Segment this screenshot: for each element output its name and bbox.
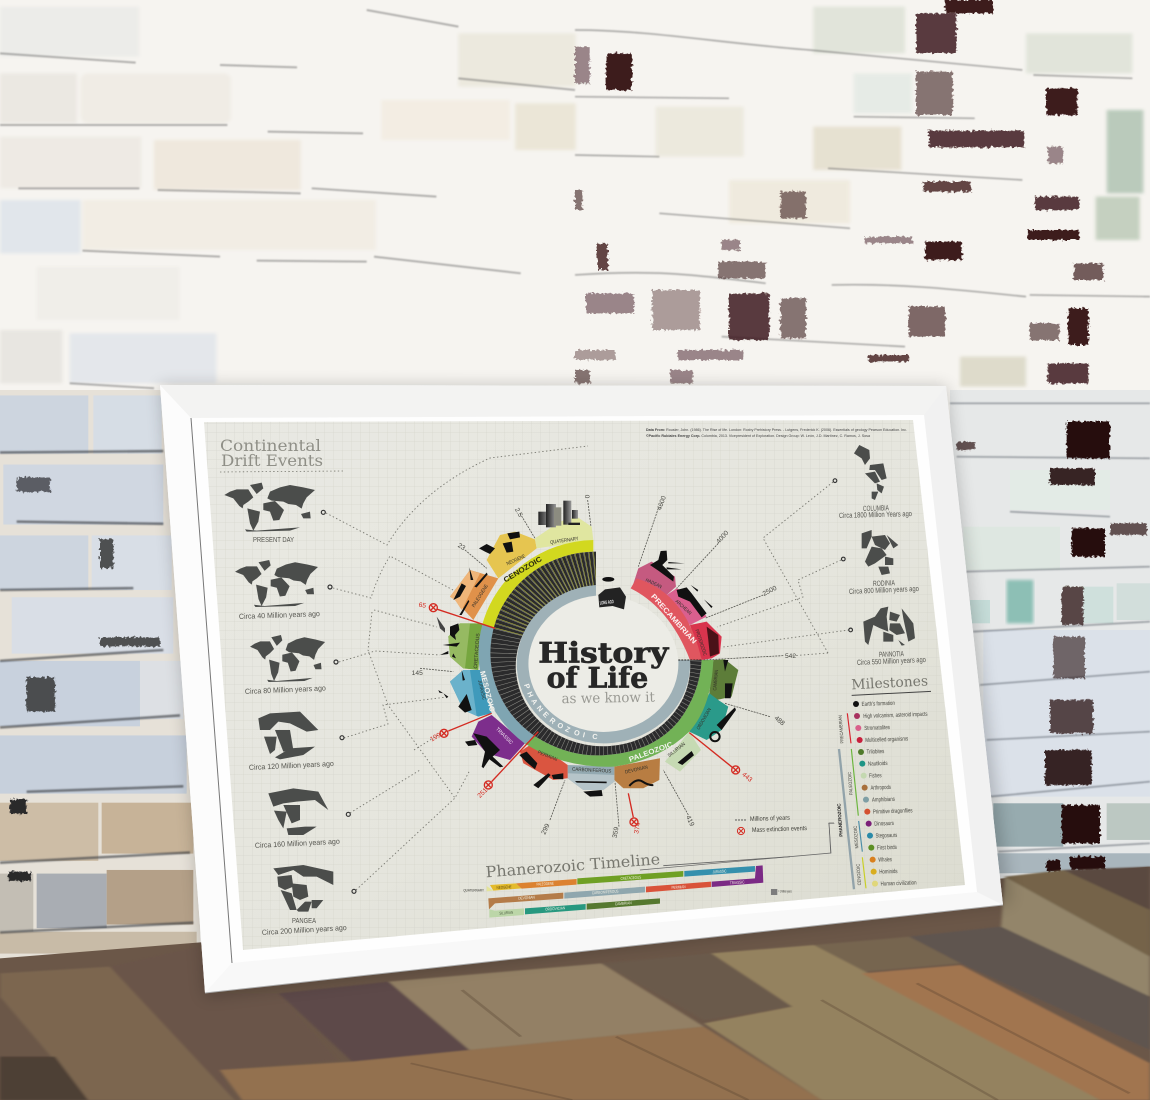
milestone labels: Human civilization <box>881 880 917 888</box>
Hadean eruption <box>650 551 685 582</box>
mass extinction markers <box>429 604 740 826</box>
map: Columbia <box>833 445 887 500</box>
period labels <box>471 536 720 776</box>
ring text: Phanerozoic: A <box>529 697 540 707</box>
milestone labels: Stromatolites <box>864 725 890 732</box>
era labels: MESOZOIC <box>478 670 497 713</box>
time scale numbers: 359 <box>612 826 621 839</box>
Mesozoic band <box>478 623 535 744</box>
Jurassic animal <box>458 670 472 713</box>
supercontinent maps, right column <box>833 445 926 667</box>
mass extinction numbers: 199 <box>429 732 443 743</box>
period segments <box>448 517 738 790</box>
lower-right wall strip <box>950 390 1150 880</box>
time scale numbers: 145 <box>412 670 423 677</box>
period labels: PERMIAN <box>537 750 558 763</box>
timeline labels: SILURIAN <box>499 910 513 916</box>
time scale numbers: 419 <box>684 815 695 828</box>
credits: Data From: Rousler, John. (1986). The Rise of life. London: Roxby Prehistory Press. - Lutgens, Frederick K. (2006). Essentials of geology Pearson Education. Inc. <box>646 427 907 432</box>
panel: Phanerozoic timeline <box>463 850 792 918</box>
map: 40 million years ago <box>235 560 318 607</box>
time scale numbers: 0 <box>584 494 591 498</box>
caption: present day: PRESENT DAY <box>253 535 294 544</box>
milestone labels: First birds <box>877 845 897 852</box>
period labels: PALEOGENE <box>471 583 490 609</box>
caption: Pangea: Circa 200 Million years ago <box>262 923 347 937</box>
Devonian fish <box>629 780 653 786</box>
credits: ©Pacific Rubiales Energy Corp. Colombia, 2013. Vicepresident of Exploration. Design Group: W. León, J.D. Martínez, C. Ramos, J. Sosa <box>646 433 871 438</box>
milestone labels: Arthropods <box>871 785 891 792</box>
lower-left wall strip <box>0 390 200 960</box>
timeline labels: CAMBRIAN <box>615 900 632 906</box>
Triassic dinosaur <box>473 733 503 768</box>
milestones heading: Milestones <box>851 673 928 693</box>
era labels: PALEOZOIC <box>628 739 675 764</box>
ring text: Phanerozoic: C <box>592 732 599 741</box>
title: as we know it <box>561 690 655 707</box>
time scale numbers: 542 <box>785 653 796 660</box>
dot: 80 million <box>334 660 338 664</box>
grey Phanerozoic ring <box>517 585 690 743</box>
ring text: Phanerozoic: P <box>522 683 532 690</box>
ring text: Phanerozoic: N <box>535 704 545 713</box>
city skyline <box>538 501 580 527</box>
dot: 40 million <box>328 585 332 589</box>
map: present day <box>224 483 325 532</box>
time scale numbers: 488 <box>773 715 786 728</box>
white picture frame <box>160 385 1003 993</box>
period: Proterozoic <box>690 622 722 660</box>
period: Cambrian <box>709 659 738 700</box>
period labels: CAMBRIAN <box>712 669 720 691</box>
map: 80 million years ago <box>250 635 325 682</box>
period labels: NEOGENE <box>506 553 527 567</box>
Archean forms <box>677 585 713 617</box>
period labels: ORDOVICIAN <box>696 707 713 731</box>
ring text: Phanerozoic: R <box>548 715 558 726</box>
period: Triassic <box>472 715 525 760</box>
time scale numbers: 4600 <box>656 495 668 511</box>
caption: Pannotia: PANNOTIA <box>879 649 904 659</box>
period: Archean <box>667 588 707 625</box>
period: Paleogene <box>450 570 498 620</box>
Long Ago rock: LONG AGO <box>600 599 614 607</box>
period labels: DEVONIAN <box>624 764 649 776</box>
title: of Life <box>547 661 648 694</box>
caption: Columbia: COLUMBIA <box>863 503 889 513</box>
period: Silurian <box>665 732 701 772</box>
caption: 80 million: Circa 80 Million years ago <box>245 683 326 696</box>
era timeline labels: PALEOZOIC <box>847 771 854 795</box>
ring text: Phanerozoic: I <box>582 730 586 739</box>
upper wall bricks, left half <box>0 7 576 388</box>
caption: Rodinia: RODINIA <box>873 578 895 588</box>
era labels <box>478 554 699 764</box>
milestone labels: Trilobites <box>867 749 884 756</box>
map: Pannotia <box>849 607 915 646</box>
mass extinction numbers: 251 <box>476 787 489 800</box>
time scale numbers: 299 <box>540 823 552 836</box>
period labels: ARCHEAN <box>674 599 693 617</box>
Neogene animals <box>479 532 520 554</box>
frame shadow <box>160 385 1010 997</box>
period: Hadean <box>633 562 676 595</box>
legend: chart key: Mass extinction events <box>752 825 808 834</box>
mass extinction numbers: 443 <box>740 771 754 784</box>
caption: 120 million: Circa 120 Million years ago <box>249 759 334 772</box>
timeline labels: CRETACEOUS <box>620 875 642 881</box>
dark striped time ring <box>490 552 702 755</box>
period: Devonian <box>614 758 660 788</box>
mass extinction numbers: 65 <box>418 602 427 610</box>
map: Rodinia <box>841 530 898 575</box>
period: Permian <box>520 742 568 780</box>
era timeline labels: PRECAMBRIAN <box>838 715 845 744</box>
Paleogene animals <box>453 567 488 615</box>
title <box>538 637 669 707</box>
period: Quaternary <box>535 517 593 548</box>
Precambrian band <box>631 578 702 660</box>
milestone labels: Dinosaurs <box>874 821 894 828</box>
period: Jurassic <box>450 670 492 717</box>
milestone labels: Primitive dragonflies <box>873 808 913 816</box>
milestone labels: Stegosaurs <box>876 833 897 840</box>
caption: Pangea: PANGEA <box>292 916 316 925</box>
timeline labels: JURASSIC <box>712 868 727 874</box>
heading: Continental Drift Events: Drift Events <box>221 452 323 470</box>
caption: Pannotia: Circa 550 Million years ago <box>857 655 926 667</box>
caption: Columbia: Circa 1800 Million Years ago <box>839 509 912 520</box>
caption: Columbia <box>839 503 912 520</box>
caption: Rodinia: Circa 800 Million years ago <box>849 584 919 596</box>
ring text: Phanerozoic: O <box>556 720 565 731</box>
era timeline labels: PHANEROZOIC <box>836 803 844 837</box>
caption: 160 million: Circa 160 Million years ago <box>255 837 340 850</box>
heading: Continental Drift Events <box>220 437 343 472</box>
connector lines <box>326 446 849 890</box>
time scale numbers <box>412 494 796 839</box>
era labels: PRECAMBRIAN <box>649 592 699 646</box>
ring text: Phanerozoic <box>522 683 599 741</box>
period: Ordovician <box>689 693 728 740</box>
Silurian fish <box>678 751 694 765</box>
timeline bars <box>487 865 777 918</box>
map: 120 million years ago <box>258 712 344 759</box>
circular chart: history of life <box>412 494 796 839</box>
milestone labels: Amphibians <box>872 797 895 804</box>
caption: 40 million: Circa 40 Million years ago <box>239 609 320 621</box>
timeline labels: NEOGENE <box>496 884 512 890</box>
Proterozoic organisms <box>707 627 719 657</box>
period labels: PROTEROZOIC <box>693 629 708 657</box>
Cretaceous animals <box>440 623 460 658</box>
milestone labels: High volcanism, asteroid impacts <box>863 712 928 720</box>
map: 160 million years ago <box>268 788 350 835</box>
ring text: Phanerozoic: O <box>573 728 581 738</box>
timeline labels: TRIASSIC <box>730 879 745 885</box>
credits <box>646 427 907 438</box>
pale centre disc <box>528 596 678 732</box>
milestone labels <box>862 701 928 888</box>
caption: Pangea <box>262 916 347 937</box>
period labels: HADEAN <box>644 577 663 591</box>
period: Cretaceous <box>448 623 483 670</box>
legend: chart key: Millions of years <box>750 815 791 823</box>
ring text: Phanerozoic: Z <box>564 724 572 735</box>
period: Carboniferous <box>568 765 614 790</box>
upper wall stains, right half <box>575 0 1150 387</box>
period labels: CARBONIFEROUS <box>572 767 612 775</box>
Permian insects <box>519 752 563 788</box>
era timeline labels: MESOZOIC <box>853 825 859 849</box>
milestone labels: Earth's formation <box>862 701 895 708</box>
time scale numbers: 2500 <box>762 585 778 598</box>
map: Pangea <box>273 865 356 912</box>
timeline labels: PERMIAN <box>671 884 686 890</box>
meteor <box>437 617 445 633</box>
timeline labels: DEVONIAN <box>518 895 535 901</box>
continental drift maps, left column <box>224 483 356 937</box>
caption: Pannotia <box>857 649 926 667</box>
Long Ago rock <box>598 577 626 609</box>
period: Neogene <box>487 532 537 578</box>
era timeline labels: CENOZOIC <box>855 863 862 886</box>
Cambrian trilobite <box>723 660 733 698</box>
timeline labels: CARBONIFEROUS <box>592 888 619 895</box>
period labels: TRIASSIC <box>494 726 514 746</box>
milestone labels: Multicelled organisms <box>865 736 908 744</box>
title: History <box>538 637 669 670</box>
timeline labels <box>463 868 792 916</box>
milestone labels: Whales <box>878 857 892 864</box>
Paleozoic band <box>525 660 713 767</box>
wooden floor <box>0 867 1150 1100</box>
timeline labels: PALEOGENE <box>536 881 554 887</box>
milestone labels: Hominids <box>879 869 898 876</box>
milestone dots <box>853 701 878 887</box>
mass extinction numbers: 374 <box>633 822 642 834</box>
mass extinction numbers <box>418 602 754 834</box>
period labels: QUATERNARY <box>550 536 580 546</box>
timeline labels: QUATERNARY <box>463 888 484 893</box>
era timeline bars <box>828 713 866 889</box>
milestone labels: Nautiloids <box>868 761 888 768</box>
text: = 1 Million years <box>778 889 792 894</box>
heading: Continental Drift Events: Continental <box>220 437 321 455</box>
legend: chart key <box>640 815 834 870</box>
Cenozoic band <box>483 540 593 628</box>
time scale labels <box>420 500 783 827</box>
timeline heading: Phanerozoic Timeline <box>485 850 661 881</box>
period labels: CRETACEOUS <box>473 632 482 669</box>
period labels: SILURIAN <box>667 741 687 759</box>
period labels: JURASSIC <box>476 680 487 701</box>
Ordovician nautilus <box>710 707 736 741</box>
era labels: CENOZOIC <box>502 554 544 584</box>
caption: Rodinia <box>849 578 919 596</box>
ring text: Phanerozoic: E <box>541 710 551 720</box>
flying reptile <box>438 690 448 698</box>
Carboniferous animals <box>575 781 607 797</box>
ring text: Phanerozoic: H <box>525 690 536 699</box>
time scale numbers: 2.5 <box>513 507 524 519</box>
timeline labels: ORDOVICIAN <box>545 905 565 912</box>
milestone labels: Fishes <box>869 773 882 780</box>
panel: milestones <box>828 673 931 889</box>
time scale numbers: 4000 <box>715 529 731 545</box>
time scale numbers: 23 <box>456 542 466 552</box>
silhouettes on the periods <box>437 501 736 797</box>
poster paper <box>204 420 965 950</box>
era timeline labels <box>836 715 862 886</box>
